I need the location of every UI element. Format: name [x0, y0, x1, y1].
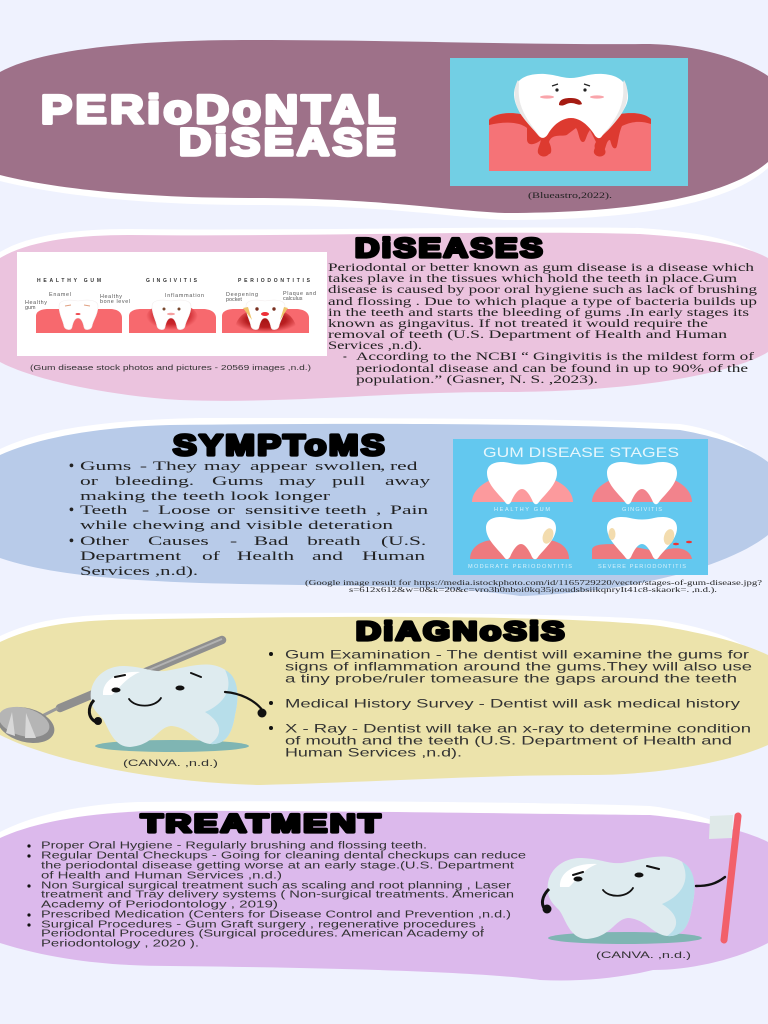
- text block: symptoms list: •: [69, 503, 74, 518]
- text block: treatment list: Regular Dental Checkups - Going for cleaning dental checkups can reduce: [41, 850, 527, 862]
- icon: tooth mascot with toothbrush: [542, 815, 738, 944]
- text block: symptoms list: Gums: [80, 458, 131, 473]
- text block: symptoms list: Services ,n.d).: [80, 563, 198, 578]
- text block: diseases paragraph: and flossing . Due to which plaque a type of bacteria builds up: [328, 296, 757, 308]
- image: bleeding tooth: [450, 58, 688, 186]
- text block: symptoms list: making the teeth look longer: [80, 488, 331, 503]
- caption: canva: (CANVA. ,n.d.): [596, 950, 691, 960]
- text block: symptoms list: may: [279, 473, 316, 488]
- text block: symptoms list: Gums: [212, 473, 263, 488]
- text block: symptoms list: [69, 458, 430, 578]
- text block: diagnosis list: [269, 648, 752, 760]
- text block: symptoms list: appear: [250, 458, 307, 473]
- text block: symptoms list: •: [69, 534, 74, 549]
- panel: diagnosis: [0, 613, 768, 785]
- text block: symptoms list: They: [153, 458, 197, 473]
- heading: title: [41, 88, 399, 164]
- text block: treatment list: Proper Oral Hygiene - Regularly brushing and flossing teeth.: [41, 840, 427, 852]
- caption: canva: (CANVA. ,n.d.): [123, 758, 218, 768]
- text block: symptoms list: sensitive: [245, 502, 320, 517]
- text block: treatment list: Surgical Procedures - Gum Graft surgery , regenerative procedures ,: [41, 920, 484, 930]
- text block: symptoms list: or: [80, 473, 98, 488]
- image: gum stages diagram: PERIODONTITIS: [238, 278, 311, 284]
- heading: title: PERioDoNTAL: [41, 88, 399, 132]
- image: gum stages diagram: Plaque and: [283, 291, 316, 297]
- text block: symptoms list: breath: [307, 533, 361, 548]
- image: gum disease stages: GUM DISEASE STAGES: [483, 444, 679, 460]
- heading: diagnosis: DiAGNoSiS: [356, 616, 567, 646]
- text block: symptoms list: Bad: [254, 533, 289, 548]
- text block: diseases paragraph: known as gingavitus. If not treated it would require the: [328, 318, 708, 330]
- text block: diagnosis list: Medical History Survey - Dentist will ask medical history: [285, 696, 740, 710]
- text block: diagnosis list: of mouth and the teeth (U.S. Department of Health and: [285, 734, 732, 748]
- heading: symptoms: SYMPToMS: [173, 430, 387, 462]
- text block: symptoms list: of: [202, 548, 220, 563]
- text block: symptoms list: away: [385, 473, 430, 488]
- text block: symptoms list: •: [69, 459, 74, 474]
- image: gum stages diagram: [17, 252, 327, 356]
- image: gum stages diagram: Deepening: [226, 292, 258, 298]
- image: gum stages diagram: pocket: [226, 297, 242, 303]
- text block: symptoms list: bleeding.: [115, 473, 194, 488]
- text block: symptoms list: Teeth: [80, 502, 127, 517]
- text block: symptoms list: and: [312, 548, 343, 563]
- text block: diagnosis list: signs of inflammation around the gums.They will also use: [285, 660, 752, 674]
- image: gum stages diagram: calculus: [283, 296, 303, 302]
- text block: treatment list: the periodontal disease getting worse at an early stage.(U.S. Department: [41, 860, 514, 872]
- image: gum stages diagram: Healthy: [100, 294, 122, 300]
- text block: diseases paragraph: [328, 262, 757, 386]
- caption: google image result: (Google image result for https://media.istockphoto.com/id/1165729220/vector/stages-of-gum-disease.jpg?: [305, 579, 762, 587]
- text block: diseases paragraph: According to the NCBI “ Gingivitis is the mildest form of: [356, 351, 754, 363]
- caption: Blueastro: (Blueastro,2022).: [528, 191, 612, 200]
- caption: google image result: [305, 579, 762, 594]
- image: gum disease stages: SEVERE PERIODONTITIS: [598, 564, 686, 570]
- text block: diseases paragraph: takes plave in the tissues which hold the teeth in place.Gum: [328, 273, 737, 285]
- text block: symptoms list: ,: [380, 458, 385, 473]
- text block: symptoms list: Causes: [148, 533, 209, 548]
- text block: diseases paragraph: in the teeth and starts the bleeding of gums .In early stages its: [328, 307, 750, 319]
- text block: symptoms list: red: [390, 458, 418, 473]
- image: gum stages diagram: gum: [25, 305, 36, 311]
- text block: diseases paragraph: Services ,n.d).: [328, 340, 422, 352]
- text block: symptoms list: Loose: [158, 502, 211, 517]
- text block: diagnosis list: Gum Examination - The dentist will examine the gums for: [285, 648, 749, 662]
- text block: symptoms list: Human: [362, 548, 425, 563]
- image: gum disease stages: [453, 439, 708, 575]
- icon: tooth mascot with dental mirror: [0, 639, 267, 752]
- text block: diagnosis list: a tiny probe/ruler tomeasure the gaps around the teeth: [285, 672, 737, 686]
- image: gum stages diagram: Inflammation: [165, 293, 204, 299]
- text block: diagnosis list: Human Services ,n.d).: [285, 746, 462, 760]
- text block: diseases paragraph: population.” (Gasner, N. S. ,2023).: [356, 374, 598, 386]
- text block: treatment list: treatment and Tray delivery systems ( Non-surgical treatments. American: [41, 890, 514, 900]
- text block: symptoms list: while chewing and visible deteration: [80, 517, 394, 532]
- text block: symptoms list: swollen: [315, 458, 382, 473]
- image: gum stages diagram: Healthy: [25, 300, 47, 306]
- text block: diseases paragraph: disease is caused by poor oral hygiene such as lack of brushing: [328, 284, 757, 296]
- heading: title: DiSEASE: [179, 122, 399, 164]
- text block: diseases paragraph: removal of teeth (U.S. Department of Health and Human: [328, 329, 727, 341]
- image: gum stages diagram: Enamel: [49, 292, 71, 298]
- panel: symptoms: [0, 418, 768, 596]
- heading: treatment: TREATMENT: [141, 810, 383, 838]
- text block: treatment list: Periodontology , 2020 ).: [41, 938, 199, 950]
- text block: symptoms list: Other: [80, 533, 129, 548]
- text block: symptoms list: -: [140, 458, 147, 473]
- image: gum disease stages: HEALTHY GUM: [494, 507, 550, 513]
- caption: gum disease stock photos: (Gum disease stock photos and pictures - 20569 images ,n.d.): [30, 363, 311, 372]
- caption: google image result: s=612x612&w=0&k=20&c=vro3h0nboi0kq35jooudsbsiikqnryIt41c8-skaork=. ,n.d.).: [349, 586, 717, 594]
- text block: symptoms list: Pain: [390, 502, 428, 517]
- heading: diseases: DiSEASES: [355, 233, 545, 263]
- text block: symptoms list: Department: [80, 548, 181, 563]
- image: gum stages diagram: GINGIVITIS: [146, 278, 198, 284]
- image: gum stages diagram: HEALTHY GUM: [37, 278, 101, 284]
- text block: symptoms list: pull: [332, 473, 365, 488]
- text block: diseases paragraph: periodontal disease and can be found in up to 90% of the: [356, 363, 748, 375]
- text block: treatment list: Non Surgical surgical treatment such as scaling and root planning , Laser: [41, 880, 512, 892]
- text block: symptoms list: teeth: [325, 502, 367, 517]
- text block: treatment list: Periodontal Procedures (Surgical procedures. American Academy of: [41, 928, 484, 940]
- text block: diseases paragraph: -: [343, 351, 347, 363]
- text block: symptoms list: (U.S.: [381, 533, 426, 548]
- panel: treatment: [0, 801, 768, 981]
- text block: symptoms list: -: [230, 533, 237, 548]
- panel: title banner: [0, 40, 768, 220]
- text block: symptoms list: -: [142, 502, 149, 517]
- text block: diseases paragraph: Periodontal or better known as gum disease is a disease which: [328, 262, 754, 274]
- text block: treatment list: Prescribed Medication (Centers for Disease Control and Prevention ,n.d.): [41, 910, 511, 920]
- image: gum disease stages: MODERATE PERIODONTITIS: [468, 564, 572, 570]
- text block: symptoms list: Health: [237, 548, 294, 563]
- text block: treatment list: Academy of Periodontology , 2019): [41, 900, 278, 910]
- image: gum disease stages: GINGIVITIS: [622, 507, 662, 513]
- text block: symptoms list: ,: [376, 502, 381, 517]
- text block: symptoms list: may: [204, 458, 241, 473]
- text block: symptoms list: or: [217, 502, 235, 517]
- panel: diseases: [0, 228, 768, 401]
- image: gum stages diagram: bone level: [100, 299, 130, 305]
- text block: treatment list: [27, 840, 527, 950]
- text block: treatment list: of Health and Human Services ,n.d.): [41, 870, 282, 882]
- text block: diagnosis list: X - Ray - Dentist will take an x-ray to determine condition: [285, 722, 751, 736]
